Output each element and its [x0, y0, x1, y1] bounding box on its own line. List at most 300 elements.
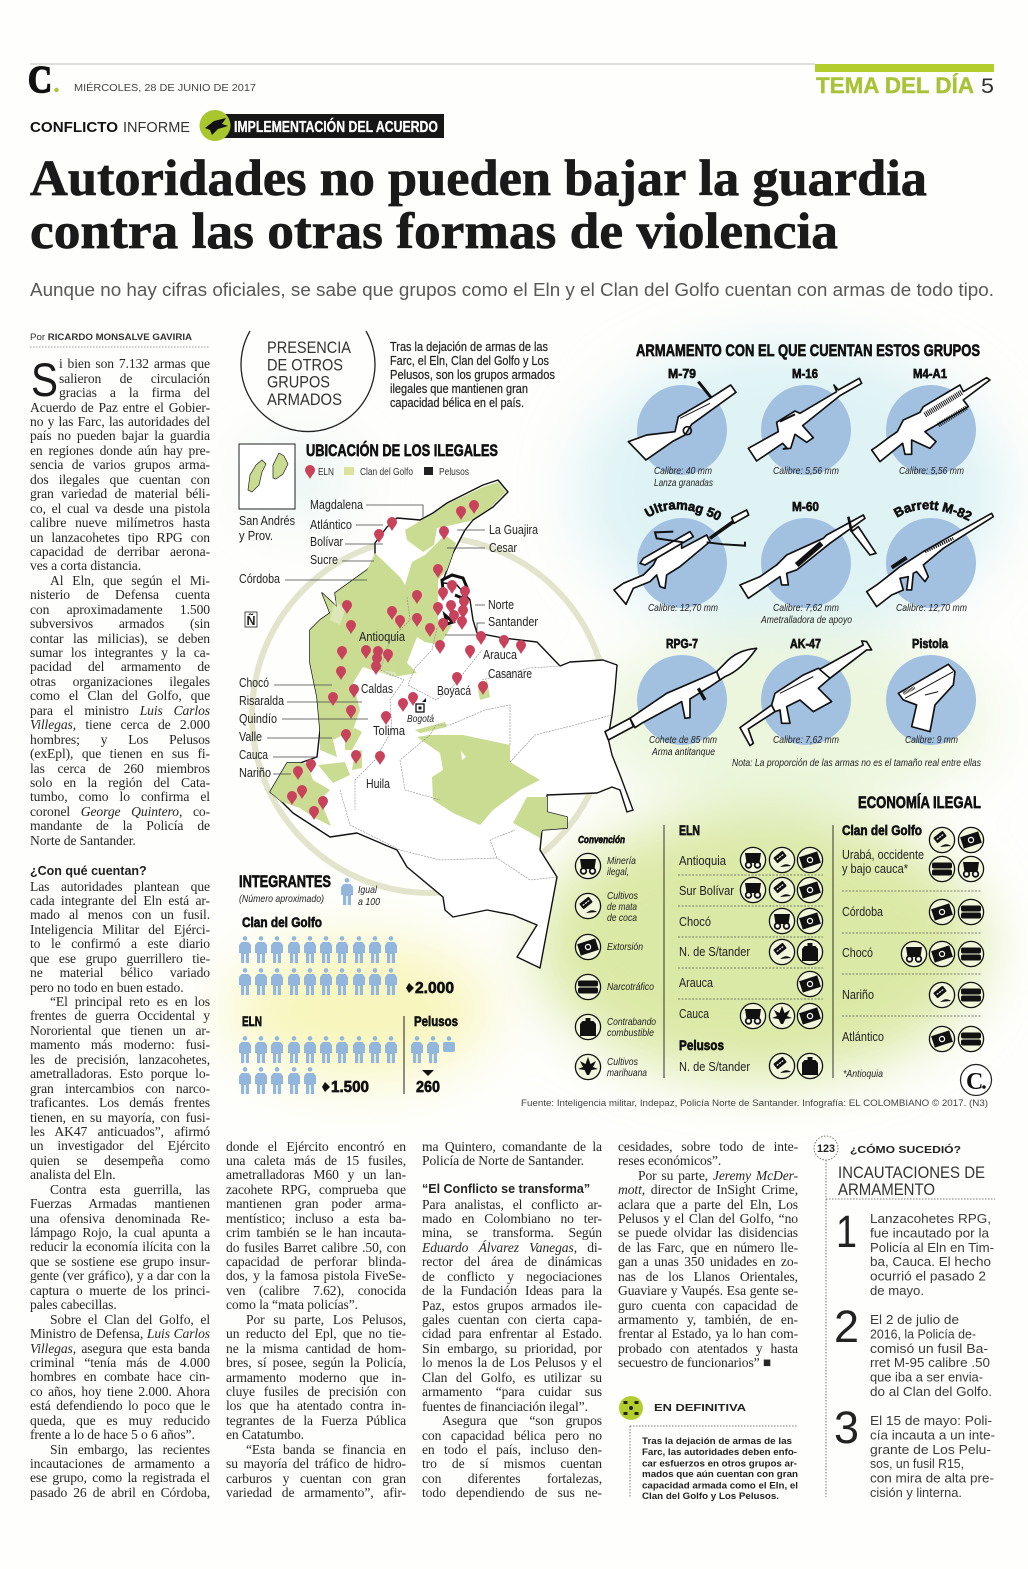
article column 1, first block: en regiones donde aún hay pre-	[30, 443, 210, 458]
economy table: Clan del Golfo: y bajo cauca*	[842, 861, 908, 876]
byline: Por RICARDO MONSALVE GAVIRIA	[30, 332, 192, 343]
department labels: Bolívar	[310, 534, 344, 549]
article column 1, first block: sumar los integrantes y la ca-	[30, 645, 210, 660]
article column 1, second block: Las autoridades plantean que	[30, 878, 210, 894]
seizure 2: rret M-95 calibre .50	[870, 1355, 990, 1370]
badge: implementacion del acuerdo: IMPLEMENTACIÓN DEL ACUERDO	[234, 118, 438, 136]
badge circle: presencia de otros grupos armados: ARMADOS	[267, 391, 342, 409]
article column 2: carburos y cuentan con gran	[226, 1471, 406, 1486]
Bogota marker: Bogotá	[407, 713, 434, 725]
economy legend: ilegal,	[607, 866, 629, 878]
map legend	[305, 465, 469, 479]
article column 1, second block: gran intercambios con narco-	[30, 1081, 210, 1096]
article column 1, second block: pales cabecillas.	[30, 1297, 117, 1312]
article column 3, second block	[422, 1196, 602, 1500]
subhead: el conflicto se transforma: “El Conflicto se transforma”	[422, 1182, 590, 1196]
weapon names: Pistola	[912, 636, 949, 651]
department labels: Chocó	[239, 675, 269, 690]
article column 1, second block: captura o muerte de los princi-	[30, 1283, 210, 1298]
article column 1, second block: frentes de guerra Occidental y	[30, 1008, 210, 1023]
weapon captions: Arma antitanque	[651, 746, 715, 758]
article column 3, second block: Para analistas, el conflicto ar-	[422, 1196, 602, 1212]
seizure 1: Policía al Eln en Tim-	[870, 1240, 994, 1255]
department labels: Huila	[366, 776, 391, 791]
sidebar: como sucedio: 123	[817, 1143, 835, 1155]
article column 1, first block: coronel George Quintero, co-	[30, 804, 210, 819]
article column 3, first block: ma Quintero, comandante de la	[422, 1139, 602, 1154]
country outline fill	[270, 480, 633, 968]
economy legend: de mata	[607, 901, 637, 913]
article column 3, second block: con diferentes fortalezas,	[422, 1471, 602, 1486]
economy table: ELN: Antioquia	[679, 853, 727, 868]
article column 1, second block: un investigador del Ejército	[30, 1138, 210, 1153]
white gaps in the western zone	[330, 600, 400, 690]
seizure 3	[834, 1402, 995, 1500]
weapon captions: Calibre: 12,70 mm	[896, 602, 967, 614]
economy legend: Narcotráfico	[607, 981, 654, 993]
intro text: ilegales que mantienen gran	[390, 382, 528, 396]
economy legend: Cultivos	[607, 1056, 639, 1068]
article column 1, second block: reducir la economía ilícita con la	[30, 1239, 210, 1254]
article column 2: bres, sí posee, según la Policía,	[226, 1355, 406, 1370]
article column 1, first block: co, el cual va desde una pistola	[30, 501, 210, 516]
article column 3, second block: de conflicto y negociaciones	[422, 1269, 602, 1284]
article column 3, second block: lo menos la de Los Pelusos y el	[422, 1355, 602, 1370]
kicker: CONFLICTO	[30, 120, 118, 136]
source line: Fuente: Inteligencia militar, Indepaz, Policía Norte de Santander. Infografía: EL COLOMBIANO © 2017. (N3)	[521, 1098, 988, 1109]
article column 4: Pelusos y el Clan del Golfo, “no	[618, 1211, 798, 1226]
article column 2: su mayoría del tráfico de hidro-	[226, 1456, 406, 1471]
article column 1, first block: solo en la región del Cata-	[30, 775, 210, 790]
article column 3, second block: todo dependiendo de sus ne-	[422, 1485, 602, 1500]
article column 2: en Catatumbo.	[226, 1427, 304, 1442]
article column 3, second block: Asegura que “son grupos	[442, 1413, 602, 1428]
map legend: Clan del Golfo	[360, 466, 413, 478]
article column 1, second block: está defendiendo lo poco que le	[30, 1398, 210, 1413]
inset label: y Prov.	[239, 528, 273, 543]
economy legend: Minería	[607, 855, 636, 867]
article column 1, first block: gran variedad de material béli-	[30, 486, 210, 501]
en definitiva box: Tras la dejación de armas de las	[642, 1435, 792, 1446]
intro text: Pelusos, son los grupos armados	[390, 368, 555, 382]
article column 4: se puede olvidar las disidencias	[618, 1225, 798, 1240]
pictogram: Pelusos: 260	[416, 1079, 440, 1096]
article column 1, first block: otras organizaciones ilegales	[30, 674, 210, 689]
article column 1, first block: ves a corta distancia.	[30, 558, 141, 573]
sidebar: como sucedio	[814, 1136, 995, 1497]
title	[30, 151, 927, 260]
seizure 2: que iba a ser envia-	[870, 1370, 983, 1385]
badge circle: presencia de otros grupos armados: DE OTROS	[267, 356, 343, 374]
article column 1, first block: dos ilegales que cuentan con	[30, 472, 210, 487]
weapon names: M-60	[792, 499, 819, 514]
department labels: Sucre	[310, 552, 338, 567]
article column 1, second block: criminal “tenía más de 4.000	[30, 1355, 210, 1370]
article column 1, first block: con aproximadamente 1.500	[30, 602, 210, 617]
weapon names: Barrett M-82	[893, 500, 972, 522]
seizure 3: cía incauta a un inte-	[870, 1427, 995, 1442]
article column 1, first block: nisterio de Defensa cuenta	[30, 587, 210, 602]
article column 1, first block: Villegas, tiene cerca de 2.000	[30, 717, 210, 732]
article column 1, first block: contar las milicias), se deben	[30, 631, 210, 646]
article column 4: cesidades, sobre todo de inte-	[618, 1139, 798, 1154]
economy table: Pelusos: N. de S/tander	[679, 1059, 751, 1074]
seizure 1: de mayo.	[870, 1283, 924, 1298]
pictogram: Pelusos: Pelusos	[414, 1013, 458, 1029]
header rule and colour bar	[30, 64, 994, 72]
article column 3, second block: cidad para enfrentar al Estado.	[422, 1326, 602, 1341]
logo circle: C	[966, 1069, 983, 1095]
article column 1, second block: les AK47 anticuados”, afirmó	[30, 1124, 210, 1139]
article column 1, first block	[30, 356, 210, 848]
economy table: Clan del Golfo: *Antioquia	[843, 1068, 883, 1080]
economy table: ELN: N. de S/tander	[679, 944, 751, 959]
article column 1, second block: Villegas, asegura que esta banda	[30, 1340, 210, 1356]
article column 3, second block: fuentes de financiación ilegal”.	[422, 1399, 588, 1414]
inset label: San Andrés	[239, 513, 295, 528]
article column 3, second block: mado en Colombiano no ter-	[422, 1211, 602, 1226]
article column 2: mantienen gran poder arma-	[226, 1196, 406, 1211]
weapon captions: Cohete de 85 mm	[649, 734, 717, 746]
intro text: Farc, el Eln, Clan del Golfo y Los	[390, 354, 549, 368]
map legend: ELN	[318, 466, 334, 478]
Bogota marker	[407, 698, 434, 725]
members heading	[239, 872, 380, 908]
department labels: Nariño	[239, 765, 271, 780]
article column 1, second block: incautaciones de armamento a	[30, 1456, 210, 1471]
article column 1, second block: ne material bélico variado	[30, 965, 210, 980]
article column 1, second block: Nororiental que tienen un ar-	[30, 1023, 210, 1038]
section label: 5	[981, 75, 994, 98]
article column 3, second block: Sin embargo, su prioridad, por	[422, 1341, 602, 1356]
article column 1, second block: Sobre el Clan del Golfo, el	[50, 1312, 210, 1327]
icon: Ultramag 50	[614, 510, 749, 604]
article column 3, first block	[422, 1139, 602, 1168]
department labels: Atlántico	[310, 517, 352, 532]
pictogram: Clan del Golfo: Clan del Golfo	[242, 914, 322, 930]
pictogram: ELN: 1.500	[331, 1079, 369, 1096]
article column 1, second block: ametralladoras. Esto porque lo-	[30, 1066, 210, 1081]
article column 1, second block: lámpago Rojo, la cual apunta a	[30, 1225, 210, 1240]
economy legend: Cultivos	[607, 890, 639, 902]
article column 1, second block: Fuerzas Armadas mantienen	[30, 1196, 210, 1211]
economy table: ELN: Chocó	[679, 914, 711, 929]
article column 1, second block: quien se desempeña como	[30, 1153, 210, 1168]
economy table: Clan del Golfo: Atlántico	[842, 1029, 884, 1044]
weapon captions: Calibre: 7,62 mm	[773, 602, 839, 614]
seizure 2: do al Clan del Golfo.	[870, 1384, 992, 1399]
article column 1, first block: país no pueden bajar la guardia	[30, 428, 210, 443]
department labels	[239, 497, 539, 791]
seizure 3: El 15 de mayo: Poli-	[870, 1413, 992, 1428]
department labels: Norte	[488, 597, 514, 612]
seizure 3: con mira de alta pre-	[870, 1471, 994, 1486]
article column 1, first block: como el Clan del Golfo, que	[30, 688, 210, 703]
pictogram: ELN: ELN	[242, 1013, 262, 1029]
weapon captions: Calibre: 40 mm	[654, 465, 712, 477]
article column 1, second block: tienen, en su mayoría, con fusi-	[30, 1110, 210, 1124]
article column 2: donde el Ejército encontró en	[226, 1138, 406, 1154]
seizure 1: ocurrió el pasado 2	[870, 1269, 986, 1284]
sidebar: como sucedio: ¿CÓMO SUCEDIÓ?	[850, 1143, 961, 1156]
article column 1, first block: pacidad del armamento de	[30, 659, 210, 674]
article column 1, first block: (exEpl), que tienen en sus fi-	[30, 746, 210, 761]
article column 4	[618, 1139, 798, 1370]
article column 1, second block	[30, 878, 210, 1500]
department labels: Antioquia	[359, 629, 406, 644]
weapons note: Nota: La proporción de las armas no es el tamaño real entre ellas	[732, 757, 982, 769]
inset label	[239, 513, 295, 543]
article column 1, second block: queda, que es muy reducido	[30, 1413, 210, 1428]
article column 1, first block: para el ministro Luis Carlos	[30, 703, 210, 718]
economy table: Pelusos	[679, 1037, 823, 1079]
article column 1, first block: salieron de circulación	[59, 371, 210, 386]
article column 1, second block: hombres en combate hace cin-	[30, 1369, 210, 1384]
pictogram: ELN	[239, 1013, 397, 1096]
article column 2: tegrantes de la Fuerza Pública	[226, 1413, 406, 1428]
weapon captions	[648, 465, 967, 758]
en definitiva box: car esfuerzos en otros grupos ar-	[642, 1458, 797, 1468]
en definitiva box: Farc, las autoridades deben enfo-	[642, 1446, 797, 1457]
department labels: Casanare	[488, 666, 532, 681]
article column 2: ven (calibre 7.62), conocida	[226, 1283, 406, 1298]
department labels: Cesar	[489, 540, 518, 555]
members heading: (Número aproximado)	[239, 893, 324, 905]
article column 1, second block: to le confirmó a este diario	[30, 936, 210, 951]
article column 1, first block: tumbo, como lo confirma el	[30, 789, 210, 804]
north mark: Ñ	[246, 613, 256, 628]
economy legend: marihuana	[607, 1067, 647, 1079]
article column 1, second block: analista del Eln.	[30, 1167, 116, 1182]
icon: AK-47	[740, 641, 872, 746]
kicker: INFORME	[123, 120, 190, 136]
seizure 3: grante de Los Pelu-	[870, 1442, 991, 1457]
badge circle: presencia de otros grupos armados: PRESENCIA	[267, 339, 351, 357]
weapon captions: Calibre: 5,56 mm	[773, 465, 839, 477]
article column 4: guro cuenta con capacidad de	[618, 1298, 798, 1313]
Clan del Golfo zones	[270, 482, 567, 838]
seizure 3: cisión y linterna.	[870, 1485, 962, 1500]
economy legend: de coca	[607, 912, 637, 924]
economy table: Clan del Golfo: Clan del Golfo	[842, 822, 922, 838]
article column 4: Guaviare y Vaupés. Esa gente se-	[618, 1283, 798, 1298]
article column 2: los que ha atentado contra in-	[226, 1398, 406, 1413]
badge: implementacion del acuerdo	[200, 110, 444, 141]
weapon circles	[637, 385, 976, 745]
article column 1, first block: Acuerdo de Paz entre el Gobier-	[30, 400, 210, 415]
seizure 2: El 2 de julio de	[870, 1312, 959, 1327]
article column 4: mott, director de InSight Crime,	[618, 1182, 798, 1197]
article column 3, second block: de la Fundación Ideas para la	[422, 1283, 602, 1298]
economy table: ELN: Arauca	[679, 975, 714, 990]
weapon names: AK-47	[790, 636, 821, 651]
pictogram: Clan del Golfo	[239, 914, 454, 997]
en definitiva box: capacidad armada como el Eln, el	[642, 1480, 798, 1490]
economy table: Clan del Golfo: Nariño	[842, 987, 874, 1002]
article column 3, first block: Policía de Norte de Santander.	[422, 1153, 584, 1168]
article column 1, first block: no y las Farc, las autoridades del	[30, 414, 210, 429]
article column 4: reses económicos”.	[618, 1153, 721, 1168]
article column 2	[226, 1138, 406, 1500]
economy legend: Extorsión	[607, 941, 643, 953]
members heading: INTEGRANTES	[239, 872, 331, 891]
economy heading: ECONOMÍA ILEGAL	[858, 793, 981, 812]
weapon drawings	[605, 378, 993, 746]
department labels: La Guajira	[489, 522, 539, 537]
members heading: Igual	[358, 884, 378, 896]
seizure 1: fue incautado por la	[870, 1225, 990, 1240]
article column 2: capacidad de perforar blinda-	[226, 1254, 406, 1269]
seizure 1: 1	[836, 1206, 857, 1257]
article column 2: una caleta más de 15 fusiles,	[226, 1153, 406, 1168]
article column 3, second block: mina, se transforma. Según	[422, 1225, 602, 1240]
subtitle: Aunque no hay cifras oficiales, se sabe que grupos como el Eln y el Clan del Golfo cuentan con armas de todo tipo.	[30, 279, 994, 300]
department labels: Boyacá	[437, 683, 472, 698]
title: Autoridades no pueden bajar la guardia	[30, 151, 927, 207]
article column 1, second block: traficantes. Los demás frentes	[30, 1095, 210, 1110]
weapon captions: Calibre: 7,62 mm	[773, 734, 839, 746]
en definitiva box: EN DEFINITIVA	[654, 1402, 747, 1414]
article column 1, second block: Ministro de Defensa, Luis Carlos	[30, 1326, 210, 1341]
economy table: ELN: Sur Bolívar	[679, 883, 735, 898]
drop cap: S	[31, 353, 58, 406]
weapon captions: Ametralladora de apoyo	[760, 614, 852, 626]
intro text	[390, 340, 555, 410]
article column 3, second block: gales cuentan con cierta capa-	[422, 1312, 602, 1327]
economy table: ELN: ELN	[679, 822, 700, 838]
economy table: Clan del Golfo	[833, 822, 984, 1080]
article column 1, second block: que se sostiene ese grupo insur-	[30, 1254, 210, 1269]
seizure 2: comisó un fusil Ba-	[870, 1341, 988, 1356]
article column 1, second block: gente (ver gráfico), y a dar con la	[30, 1268, 210, 1283]
badge circle: presencia de otros grupos armados: GRUPOS	[267, 374, 330, 392]
article column 4: probado con atentados y hasta	[618, 1341, 798, 1356]
article column 1, first block: un lanzacohetes tipo RPG con	[30, 530, 210, 545]
holes in zones	[377, 726, 466, 760]
article column 1, first block: Al Eln, que según el Mi-	[50, 573, 210, 588]
article column 1, first block: Norte de Santander.	[30, 833, 136, 848]
article column 1, second block: cada integrante del Eln está ar-	[30, 893, 210, 908]
seizure 2: 2	[834, 1301, 859, 1352]
section label: TEMA DEL DÍA	[816, 73, 974, 98]
sidebar: como sucedio: INCAUTACIONES DE	[838, 1164, 985, 1182]
seizure 1: Lanzacohetes RPG,	[870, 1211, 991, 1226]
article column 1, second block: les de precisión, lanzacohetes,	[30, 1052, 210, 1067]
icon: M-16	[748, 378, 862, 461]
article column 2: cluye fusiles de precisión con	[226, 1384, 406, 1399]
icon: Barrett M-82	[867, 513, 993, 607]
article column 2: do fusiles Barret calibre .50, con	[226, 1240, 406, 1255]
article column 2: ametralladoras M60 y un lan-	[226, 1167, 406, 1182]
article column 2: crim también se le han incauta-	[226, 1225, 406, 1240]
article column 4: aclara que a parte del Eln, Los	[618, 1197, 798, 1212]
article column 4: frentar al Estado, ya lo han com-	[618, 1326, 798, 1341]
article column 1, first block: sencia de varios grupos arma-	[30, 457, 210, 472]
logo circle	[960, 1064, 992, 1096]
economy legend: Contrabando	[607, 1016, 656, 1028]
icon: M-60	[740, 515, 876, 598]
weapon names: M-79	[668, 366, 696, 381]
seizure 1: ba, Cauca. El hecho	[870, 1254, 991, 1269]
article column 3, second block: rector del área de dinámicas	[422, 1254, 602, 1269]
article column 3, second block: tro de sí mismos cuentan	[422, 1456, 602, 1471]
article column 1, second block: co años, hoy tiene 2.000. Ahora	[30, 1384, 210, 1399]
weapon names: M4-A1	[913, 366, 947, 381]
article column 2: dos, y la famosa pistola FiveSe-	[226, 1268, 406, 1283]
en definitiva box: mados que aún cuentan con gran	[642, 1468, 798, 1479]
article column 1, second block: que ese grupo guerrillero tie-	[30, 951, 210, 966]
seizure 2	[834, 1301, 992, 1399]
article column 1, first block: i bien son 7.132 armas que	[59, 356, 210, 371]
department labels: Valle	[239, 729, 262, 744]
article column 1, second block: Inteligencia Militar del Ejérci-	[30, 922, 210, 937]
article column 1, second block: mado al menos con un fusil.	[30, 907, 210, 922]
pictogram: Pelusos	[404, 1013, 458, 1096]
article column 2: un reducto del Epl, que no tie-	[226, 1326, 406, 1341]
article column 1, second block: ese grupo, como la registrada el	[30, 1470, 210, 1485]
seizure 3: sos, un fusil R15,	[870, 1456, 964, 1471]
department labels: Quindío	[239, 711, 277, 726]
article column 3, second block: Clan del Golfo, es utilizar su	[422, 1370, 602, 1385]
article column 1, first block: hombres; y Los Pelusos	[30, 732, 210, 747]
seizure 1	[836, 1206, 994, 1298]
sidebar: como sucedio: ARMAMENTO	[838, 1181, 935, 1199]
article column 4: de las Farc, que en número lle-	[618, 1240, 798, 1255]
en definitiva box: Clan del Golfo y Los Pelusos.	[642, 1490, 779, 1501]
department labels: Santander	[488, 614, 539, 629]
economy legend: Convención	[578, 834, 625, 846]
article column 4: secuestro de funcionarios” ■	[618, 1355, 771, 1370]
economy table: Clan del Golfo: Córdoba	[842, 904, 884, 919]
pictogram: Clan del Golfo: 2.000	[415, 980, 454, 997]
article column 1, second block: “El principal reto es en los	[50, 994, 210, 1009]
article column 3, second block: en todo el país, incluso den-	[422, 1442, 602, 1457]
weapon captions: Calibre: 9 mm	[905, 734, 958, 746]
article column 1, first block: capacidad de derribar aerona-	[30, 544, 210, 559]
article column 4: armamento y, también, de en-	[618, 1312, 798, 1327]
department labels: Arauca	[483, 647, 518, 662]
article column 4: gan a unas 350 unidades en zo-	[618, 1254, 798, 1269]
badge circle: presencia de otros grupos armados	[241, 331, 375, 432]
weapon names: Ultramag 50	[644, 502, 722, 520]
article column 1, second block: mamento más moderno: fusi-	[30, 1037, 210, 1052]
weapon captions: Calibre: 5,56 mm	[899, 465, 964, 477]
kicker	[30, 120, 190, 136]
economy legend: combustible	[607, 1027, 654, 1039]
article column 1, first block: calibre nueve milímetros hasta	[30, 515, 210, 530]
seizure 2: 2016, la Policía de-	[870, 1326, 976, 1341]
economy legend	[575, 834, 656, 1080]
article column 1, second block: pero no todo en buen estado.	[30, 980, 184, 995]
article column 2: zacohete RPG, comprueba que	[226, 1182, 406, 1197]
weapon captions: Lanza granadas	[654, 477, 714, 489]
article column 2: armamento moderno que in-	[226, 1370, 406, 1384]
icon: RPG-7	[605, 648, 757, 740]
infographic background tint	[230, 340, 1005, 1080]
department labels: Córdoba	[239, 571, 281, 586]
article column 1, first block: mandante de la Policía de	[30, 818, 210, 833]
article column 3, second block: Eduardo Álvarez Vanegas, di-	[422, 1240, 602, 1255]
article column 2: variedad de armamento”, afir-	[226, 1485, 406, 1500]
economy table: Clan del Golfo: Urabá, occidente	[842, 847, 924, 862]
department labels: Cauca	[239, 747, 269, 762]
article column 1, second block: frente a lo de hace 5 o 6 años”.	[30, 1427, 195, 1442]
icon: M-79	[628, 382, 736, 460]
article column 2: Por su parte, Los Pelusos,	[246, 1312, 406, 1327]
inset: San Andres y Providencia	[239, 444, 295, 509]
members heading: a 100	[358, 896, 380, 908]
article column 3, second block: Paz, estos grupos armados ile-	[422, 1298, 602, 1313]
